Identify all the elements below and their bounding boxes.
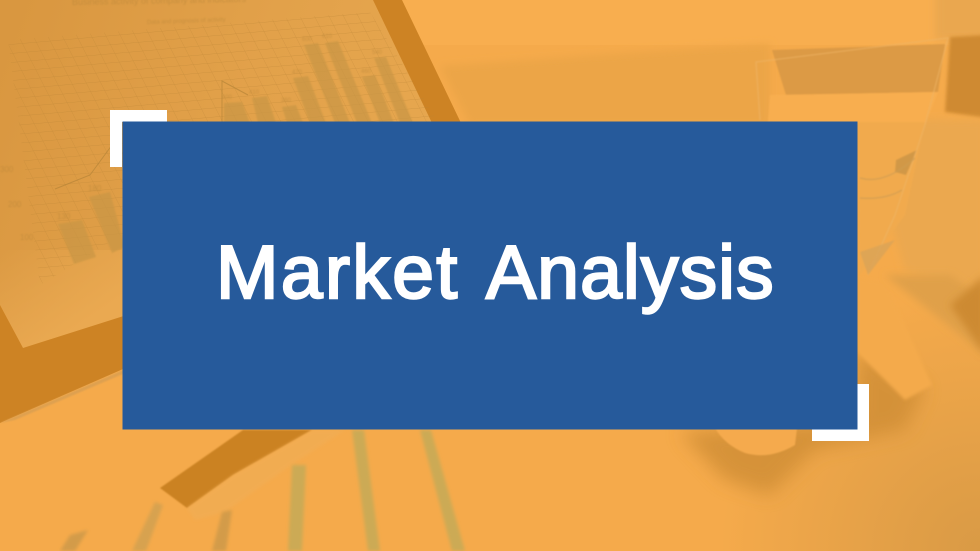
tablet labels: 100: [20, 233, 34, 242]
tablet labels: 600: [302, 37, 313, 43]
tablet labels: 180: [88, 184, 102, 193]
tablet bar chart: [58, 41, 413, 264]
glass of water: [756, 38, 948, 275]
title: Market: [216, 230, 460, 314]
tablet labels: 410: [249, 90, 260, 96]
tablet labels: Data and prognosis of activity: [147, 17, 226, 26]
tablet frame: [0, 0, 461, 423]
tablet labels: 540: [372, 50, 383, 56]
tablet labels: 200: [8, 200, 22, 209]
corner bracket: bottom right: [812, 384, 869, 441]
spreadsheet grid: [8, 12, 440, 285]
tablet labels: 300: [0, 165, 14, 174]
corner bracket: top left: [110, 110, 167, 167]
tablet screen: [0, 0, 460, 348]
tablet labels: 610: [322, 34, 333, 40]
tablet trend line: [55, 81, 248, 189]
tablet labels: 360: [281, 98, 292, 104]
tablet labels: 460: [361, 69, 372, 75]
tablet labels: 470: [292, 70, 303, 76]
tablet labels: 130: [57, 212, 71, 221]
tablet labels: 400: [222, 95, 233, 101]
pen and rulers on the desk: [60, 430, 465, 551]
tablet labels: [0, 0, 383, 242]
phone on the desk: [680, 275, 980, 495]
title: Analysis: [486, 230, 775, 314]
title panel: [122, 122, 858, 430]
